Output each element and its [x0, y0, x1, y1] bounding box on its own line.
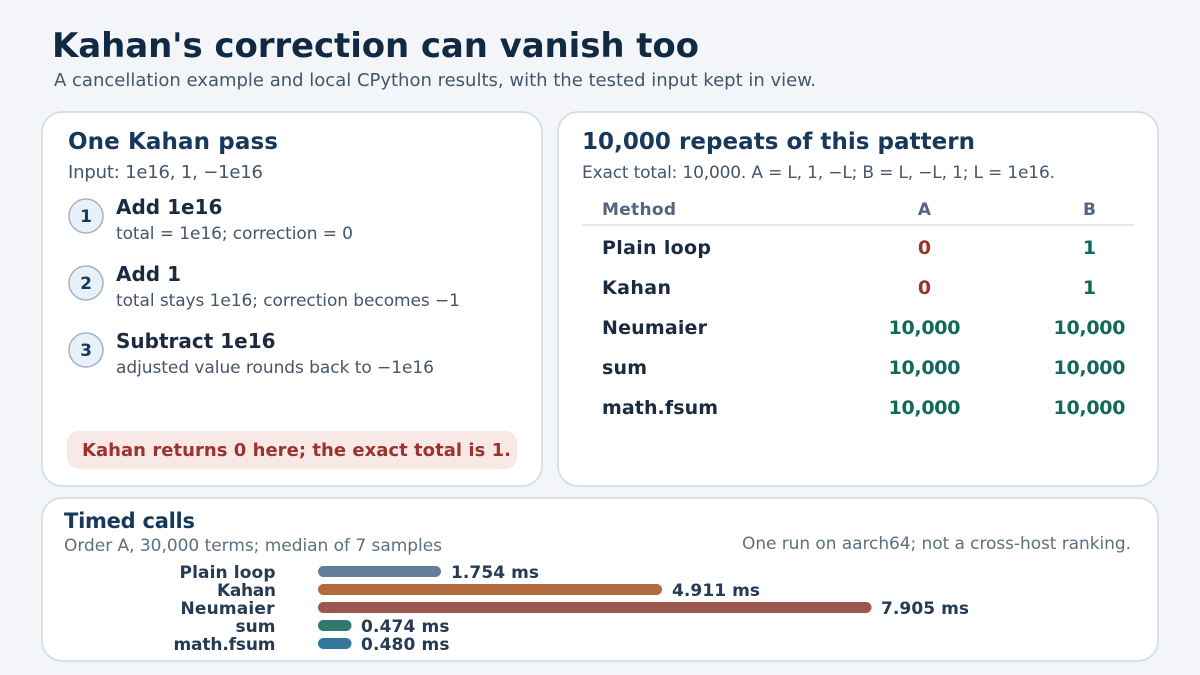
table row: math.fsum: 10,000 — [1054, 397, 1126, 419]
bar: math.fsum: math.fsum — [174, 635, 276, 655]
input line: Input: 1e16, 1, −1e16 — [68, 162, 263, 183]
exact total note: Exact total: 10,000. A = L, 1, −L; B = L, −L, 1; L = 1e16. — [582, 163, 1055, 183]
bar chart — [174, 563, 969, 655]
table row: Plain loop: 1 — [1083, 237, 1096, 259]
bar: Kahan: Kahan — [217, 581, 276, 601]
bar: sum: 0.474 ms — [361, 617, 450, 637]
step 1: Add 1e16 — [116, 195, 222, 219]
timing subtitle: Order A, 30,000 terms; median of 7 samples — [64, 536, 442, 556]
step 2: Add 1 — [116, 262, 181, 286]
host note: One run on aarch64; not a cross-host ranking. — [742, 534, 1131, 554]
panel: timed calls — [42, 498, 1158, 661]
panel heading: One Kahan pass — [68, 129, 278, 155]
step 2 — [69, 262, 460, 311]
table row: Kahan: Kahan — [602, 277, 671, 299]
table row: Kahan: 1 — [1083, 277, 1096, 299]
table row: Kahan: 0 — [918, 277, 931, 299]
panel: 10,000 repeats table — [558, 112, 1158, 486]
table row: Neumaier: Neumaier — [602, 317, 708, 339]
bar: Plain loop — [180, 563, 539, 583]
table row: math.fsum: 10,000 — [888, 397, 960, 419]
step 3 — [69, 329, 434, 378]
bar: Kahan — [217, 581, 760, 601]
step 3: 3 — [80, 341, 92, 361]
step 1: 1 — [80, 207, 92, 227]
bar: sum: sum — [236, 617, 276, 637]
bar: Neumaier — [180, 599, 969, 619]
bar: Neumaier: Neumaier — [180, 599, 275, 619]
table row: Kahan — [602, 277, 1096, 299]
table header: Method — [602, 200, 676, 220]
table row: sum — [602, 357, 1126, 379]
bar: Neumaier: 7.905 ms — [881, 599, 969, 619]
step 1 — [69, 195, 353, 244]
panel: one Kahan pass — [42, 112, 542, 486]
step 2: total stays 1e16; correction becomes −1 — [116, 291, 460, 311]
bar: Plain loop: 1.754 ms — [451, 563, 539, 583]
callout: Kahan returns 0 here; the exact total is 1. — [82, 440, 511, 461]
table row: sum: 10,000 — [1054, 357, 1126, 379]
bar: math.fsum — [174, 635, 450, 655]
table row: Neumaier — [602, 317, 1126, 339]
subtitle: A cancellation example and local CPython results, with the tested input kept in view. — [54, 70, 816, 91]
step 2: 2 — [80, 274, 92, 294]
bar: Plain loop: Plain loop — [180, 563, 276, 583]
table row: sum: 10,000 — [888, 357, 960, 379]
table row: math.fsum: math.fsum — [602, 397, 718, 419]
step 3: adjusted value rounds back to −1e16 — [116, 358, 434, 378]
bar: sum — [236, 617, 450, 637]
table row: Plain loop: 0 — [918, 237, 931, 259]
table header: B — [1083, 200, 1096, 220]
panel heading: Timed calls — [64, 509, 195, 533]
step 3: Subtract 1e16 — [116, 329, 276, 353]
table header — [602, 200, 1096, 220]
table row: Neumaier: 10,000 — [1054, 317, 1126, 339]
table row: sum: sum — [602, 357, 647, 379]
table header: A — [918, 200, 932, 220]
panel heading: 10,000 repeats of this pattern — [582, 129, 975, 155]
table row: math.fsum — [602, 397, 1126, 419]
bar: math.fsum: 0.480 ms — [361, 635, 450, 655]
step 1: total = 1e16; correction = 0 — [116, 224, 353, 244]
table row: Plain loop — [602, 237, 1096, 259]
callout — [67, 431, 517, 469]
table row: Neumaier: 10,000 — [888, 317, 960, 339]
bar: Kahan: 4.911 ms — [672, 581, 760, 601]
title: Kahan's correction can vanish too — [52, 26, 699, 66]
table row: Plain loop: Plain loop — [602, 237, 711, 259]
